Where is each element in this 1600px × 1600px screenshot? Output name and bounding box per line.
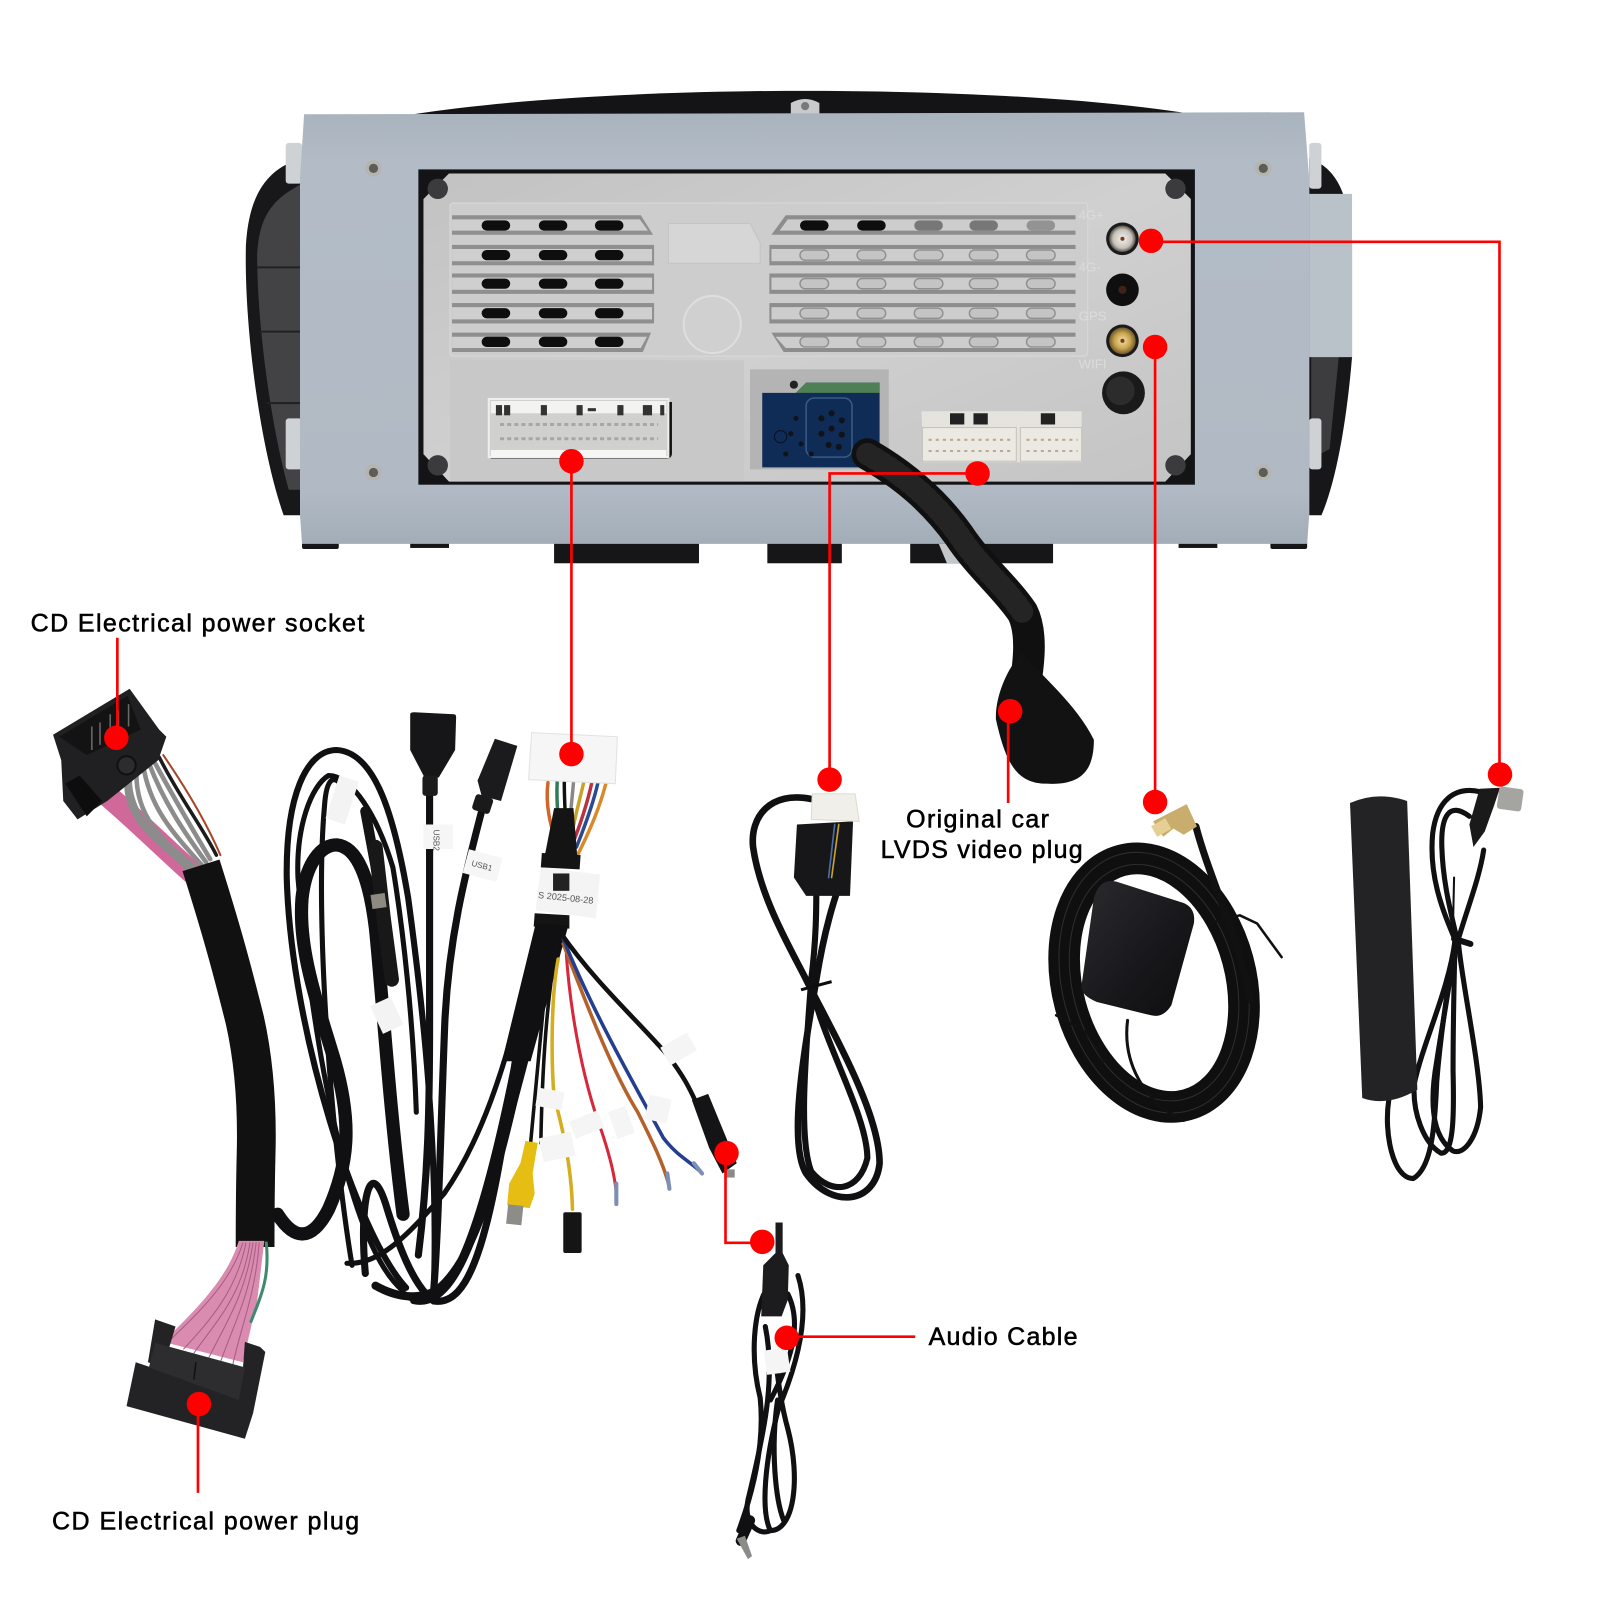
LVDS video cable <box>753 794 880 1197</box>
bracket front tab <box>939 544 964 563</box>
callout: 4G antenna <box>1139 229 1512 787</box>
metal chassis plate <box>300 112 1309 544</box>
braided loop <box>278 845 403 1234</box>
corner screws <box>428 179 1186 476</box>
main cable bundle loops <box>278 750 559 1302</box>
tag: upper loop <box>326 776 359 825</box>
braided sleeve <box>201 865 256 1247</box>
tag: USB1 <box>463 849 503 882</box>
callout: jack to audio plug <box>714 1141 774 1254</box>
top screw tab <box>791 99 819 114</box>
bottom 3.5mm plug <box>737 1536 752 1559</box>
left white connector <box>489 399 670 457</box>
white multi-pin connector with coloured wires <box>502 733 617 1061</box>
black bundle below label <box>502 923 568 1061</box>
port silkscreen labels: 4G+ <box>1079 207 1104 222</box>
cable tags <box>326 776 503 1034</box>
chassis cut-out <box>418 169 1195 485</box>
chassis screws <box>365 160 1271 481</box>
USB connector 1 <box>434 739 517 1291</box>
antenna ports <box>1102 222 1145 414</box>
gold SMA connector <box>1151 804 1197 837</box>
coloured branch wires <box>531 934 702 1209</box>
label: CD Electrical power socket: CD Electrical power socket <box>31 610 364 638</box>
lower case plate <box>450 360 744 481</box>
white connector <box>811 794 859 821</box>
power plug <box>127 1319 265 1439</box>
right white connector <box>921 411 1082 462</box>
tag: USB1: USB1 <box>470 859 494 873</box>
tag: USB2: USB2 <box>432 830 441 851</box>
cable tie <box>801 982 832 990</box>
callout: power plug <box>187 1392 211 1493</box>
connector body <box>529 733 617 784</box>
USB connector 2 <box>410 712 456 1255</box>
yellow RCA plug <box>506 1141 538 1225</box>
raised vent panel <box>450 203 1088 356</box>
small black connector <box>563 1212 582 1253</box>
tag: USB2 <box>423 824 453 851</box>
callout: power socket <box>104 638 129 750</box>
blue circuit board <box>750 369 889 469</box>
right vent slats <box>769 215 1076 352</box>
fan of coloured wires <box>547 783 606 857</box>
label: Original car LVDS video plug: LVDS video plug <box>881 836 1083 864</box>
audio jack on loop <box>365 811 392 980</box>
audio cable <box>737 1222 803 1559</box>
port silkscreen labels: WIFI <box>1079 356 1107 371</box>
tag: audio <box>370 997 403 1034</box>
label: CD Electrical power plug: CD Electrical power plug <box>52 1508 359 1536</box>
MIC jack <box>692 1094 737 1178</box>
left vent slats <box>452 215 654 352</box>
pink wires to plug <box>163 1241 267 1365</box>
antenna bar <box>1350 796 1417 1101</box>
4G antenna <box>1350 786 1524 1179</box>
wire tips <box>616 1163 702 1204</box>
label: Original car LVDS video plug <box>881 806 1083 864</box>
QR label: S 2025-08-28 <box>538 890 594 906</box>
callout: original car video plug <box>998 699 1022 803</box>
black binder <box>534 853 581 929</box>
braided LVDS cable <box>867 454 1094 784</box>
top 3.5mm plug <box>761 1222 789 1316</box>
side bracket tab <box>1309 194 1352 357</box>
wire tags <box>535 1032 697 1162</box>
sleeve <box>794 821 853 896</box>
outer cable loops <box>287 750 435 1296</box>
callout: GPS antenna <box>1143 335 1167 814</box>
GPS puck <box>1081 881 1194 1016</box>
callout lines and dots <box>104 229 1512 1493</box>
black sleeve <box>544 808 578 860</box>
head unit rear view <box>246 91 1352 784</box>
screen bezel behind chassis <box>246 91 1352 515</box>
silver rear case <box>423 173 1191 482</box>
port silkscreen labels <box>1079 207 1107 371</box>
cable tag <box>764 1347 790 1375</box>
callout: audio cable <box>774 1326 915 1350</box>
callout: LVDS connector <box>817 461 990 792</box>
port silkscreen labels: GPS <box>1079 308 1107 323</box>
loop bottom strands <box>347 969 529 1263</box>
antenna connector <box>1469 786 1524 847</box>
harness wire fan top <box>102 755 220 872</box>
embossed square and circle <box>668 223 760 353</box>
callout: white connector <box>559 449 584 766</box>
label: Audio Cable: Audio Cable <box>929 1323 1078 1351</box>
left harness: power socket to power plug <box>53 689 267 1439</box>
label: Original car LVDS video plug: Original car <box>906 806 1049 834</box>
port silkscreen labels: 4G- <box>1079 259 1101 274</box>
GPS antenna <box>1031 804 1282 1135</box>
power socket <box>53 689 166 819</box>
bottom black tabs <box>302 541 1307 563</box>
QR label <box>536 867 600 918</box>
